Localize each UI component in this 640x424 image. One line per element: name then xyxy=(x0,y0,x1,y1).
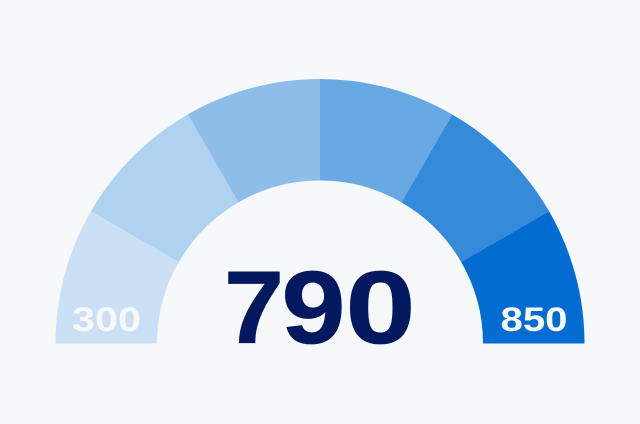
semicircular gauge xyxy=(56,79,584,344)
gauge segment 3 xyxy=(188,79,320,202)
current score: 0 xyxy=(346,250,416,365)
gauge segment 6: darkest xyxy=(461,211,584,344)
current score: 7 xyxy=(224,250,284,365)
gauge segment 1: lightest xyxy=(56,211,179,344)
gauge segment 2 xyxy=(91,114,238,262)
minimum score label: 300 xyxy=(72,301,141,339)
gauge segment 4 xyxy=(320,79,452,202)
gauge segment 5 xyxy=(402,114,549,262)
current score: 9 xyxy=(282,250,346,365)
maximum score label: 850 xyxy=(500,301,568,339)
